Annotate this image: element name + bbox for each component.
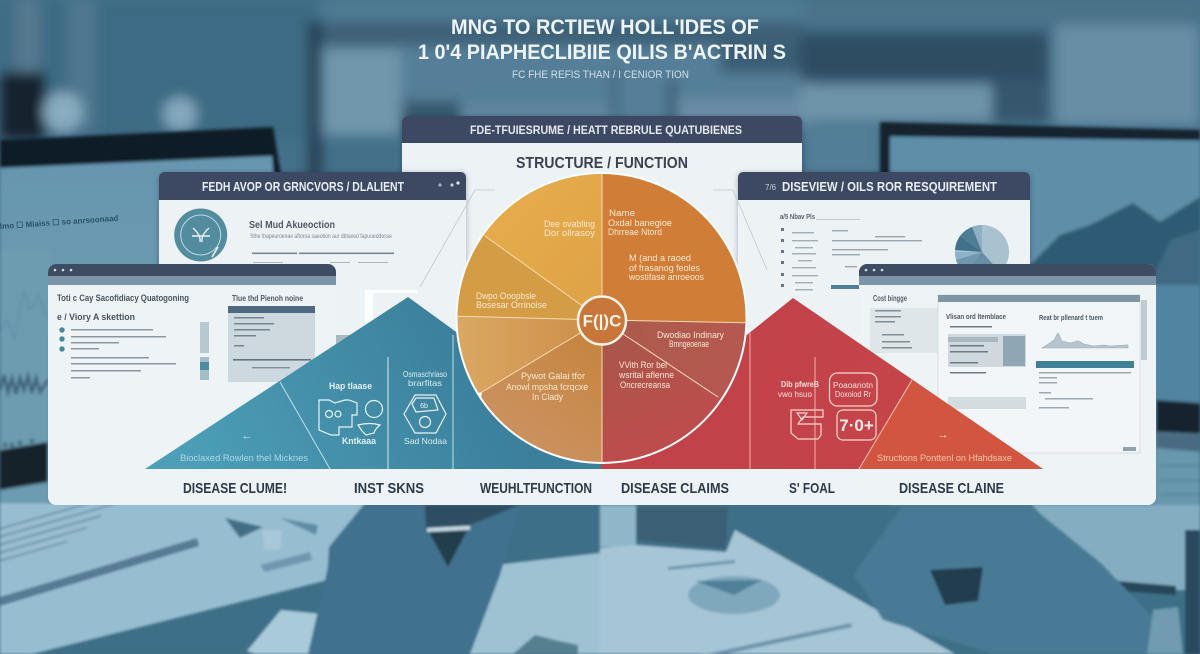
title bbox=[418, 16, 786, 81]
bottom category labels: DISEASE CLAINE bbox=[899, 480, 1004, 497]
left teal triangle: Osmaschriaso bbox=[403, 369, 447, 379]
right red triangle: Structions Ponttenl on Hfahdsaxe bbox=[877, 453, 1012, 463]
panel: left review: FEDH AVOP OR GRNCVORS / DLALIENT bbox=[202, 179, 404, 194]
panel: top structure/function: STRUCTURE / FUNCTION bbox=[516, 155, 688, 172]
wheel segment labels: wostifase anroeoos bbox=[628, 272, 704, 282]
wheel segment labels: Dhrreae Ntord bbox=[608, 227, 662, 237]
bottom category labels: INST SKNS bbox=[354, 480, 424, 497]
panel: top structure/function bbox=[402, 116, 802, 476]
wheel segment labels: Dee ovabling bbox=[544, 219, 595, 229]
inner dialog window: Vlisan ord ltemblace bbox=[946, 312, 1006, 321]
circular structure/function wheel bbox=[456, 172, 748, 464]
right red triangle: Dib pfwreB bbox=[781, 379, 819, 389]
inner dialog window bbox=[938, 295, 1147, 453]
wheel segment labels: Bmngeoenae bbox=[669, 339, 709, 349]
icon: gauge circle bbox=[174, 208, 227, 262]
wheel segment labels: VVith Ror bel bbox=[619, 360, 667, 370]
icon: 7.0+ badge: 7·0+ bbox=[839, 416, 874, 435]
panel: left window: Toti c Cay Sacofidiacy Quatogoning bbox=[57, 293, 189, 303]
left teal triangle bbox=[145, 297, 601, 469]
wheel segment labels: Name bbox=[609, 208, 635, 218]
panel: right review bbox=[738, 172, 1030, 442]
bottom category labels: DISEASE CLUME! bbox=[183, 480, 287, 497]
icon: left arrow: ← bbox=[242, 430, 252, 442]
panel: bottom white card bbox=[48, 380, 1156, 505]
bottom category labels: S' FOAL bbox=[789, 480, 835, 497]
panel: left window bbox=[48, 264, 417, 504]
title: 1 0'4 PIAPHECLIBIIE QILIS B'ACTRIN S bbox=[418, 41, 786, 64]
right red triangle: vwo hsuo bbox=[778, 389, 812, 399]
right red triangle bbox=[601, 298, 1043, 469]
icon: right arrow: → bbox=[938, 429, 948, 441]
title: MNG TO RCTIEW HOLL'IDES OF bbox=[451, 16, 759, 39]
wheel segment labels: Anowl mpsha fcrqcxe bbox=[506, 382, 588, 392]
bottom category labels: WEUHLTFUNCTION bbox=[480, 480, 592, 497]
wheel segment labels: Oncrecreansa bbox=[620, 380, 670, 390]
icon: speech callout: Poaoanotn bbox=[833, 381, 873, 390]
panel: right review: DISEVIEW / OILS ROR RESQUIREMENT bbox=[782, 179, 997, 194]
connector lines bbox=[420, 190, 767, 287]
wheel segment labels: of frasanog feoles bbox=[629, 263, 700, 273]
panel: left window: Tlue thd Pienoh noine bbox=[232, 294, 303, 303]
wheel segment labels: Dwpo Ooopbsle bbox=[476, 291, 536, 301]
wheel segment labels: Dwodiao Indinary bbox=[657, 330, 724, 340]
wheel segment labels: Dor ollrasoy bbox=[544, 228, 596, 238]
icon: speech callout bbox=[830, 373, 877, 406]
wheel segment labels: M (and a raoed bbox=[629, 253, 691, 263]
panel: right review: a/5 Nbav Pls bbox=[780, 214, 815, 221]
bottom category labels bbox=[183, 480, 1004, 497]
wheel center badge: F(|)C bbox=[583, 312, 621, 330]
panel: left review bbox=[159, 172, 466, 387]
wheel segment labels: Bosesar Orrinoise bbox=[476, 300, 547, 310]
panel: left review: Sthe thapeuroenae aftoroa saeotion aur dbtaxed fapuoeddesse bbox=[250, 234, 393, 240]
icon: 7.0+ badge bbox=[837, 410, 876, 440]
laptop screen text: Imo ☐ Miaiss ☐ so anrsoonaad bbox=[0, 214, 119, 231]
pie chart bbox=[955, 225, 1009, 279]
title: FC FHE REFIS THAN / I CENIOR TION bbox=[512, 69, 689, 81]
panel: right window: Cost bingge bbox=[873, 293, 907, 303]
left teal triangle: brarfitas bbox=[408, 378, 442, 388]
wheel segment labels bbox=[476, 208, 724, 402]
panel: right window bbox=[859, 264, 1156, 505]
wheel segment labels: In Clady bbox=[532, 392, 563, 402]
icon: hexagon bbox=[404, 395, 446, 433]
icon: outlined objects bbox=[319, 400, 382, 435]
left teal triangle: Kntkaaa bbox=[342, 436, 377, 446]
left teal triangle: Hap tlaase bbox=[329, 381, 372, 392]
left teal triangle: Bioclaxed Rowlen thel Micknes bbox=[180, 453, 309, 463]
inner dialog window: Reat br pllenard t tuem bbox=[1039, 313, 1103, 322]
panel: right review: 7/6 bbox=[765, 183, 777, 192]
wheel segment labels: wsrital aflenne bbox=[618, 370, 674, 380]
wheel center badge bbox=[578, 296, 626, 344]
panel: top structure/function: FDE-TFUIESRUME / HEATT REBRULE QUATUBIENES bbox=[470, 123, 742, 137]
icon: hexagon: 6b bbox=[420, 403, 428, 410]
panel: left window: e / Viory A skettion bbox=[57, 312, 135, 323]
wheel segment labels: Pywot Galai tfor bbox=[521, 371, 585, 381]
area chart bbox=[1042, 333, 1128, 348]
panel: left review: Sel Mud Akueoction bbox=[249, 220, 335, 231]
icon: funnel bracket bbox=[791, 410, 823, 439]
icon: speech callout: Doxoiod Rr bbox=[835, 390, 871, 399]
bottom category labels: DISEASE CLAIMS bbox=[621, 480, 729, 497]
left teal triangle: Sad Nodaa bbox=[404, 436, 447, 446]
wheel segment labels: Oxdal banegioe bbox=[608, 218, 672, 228]
